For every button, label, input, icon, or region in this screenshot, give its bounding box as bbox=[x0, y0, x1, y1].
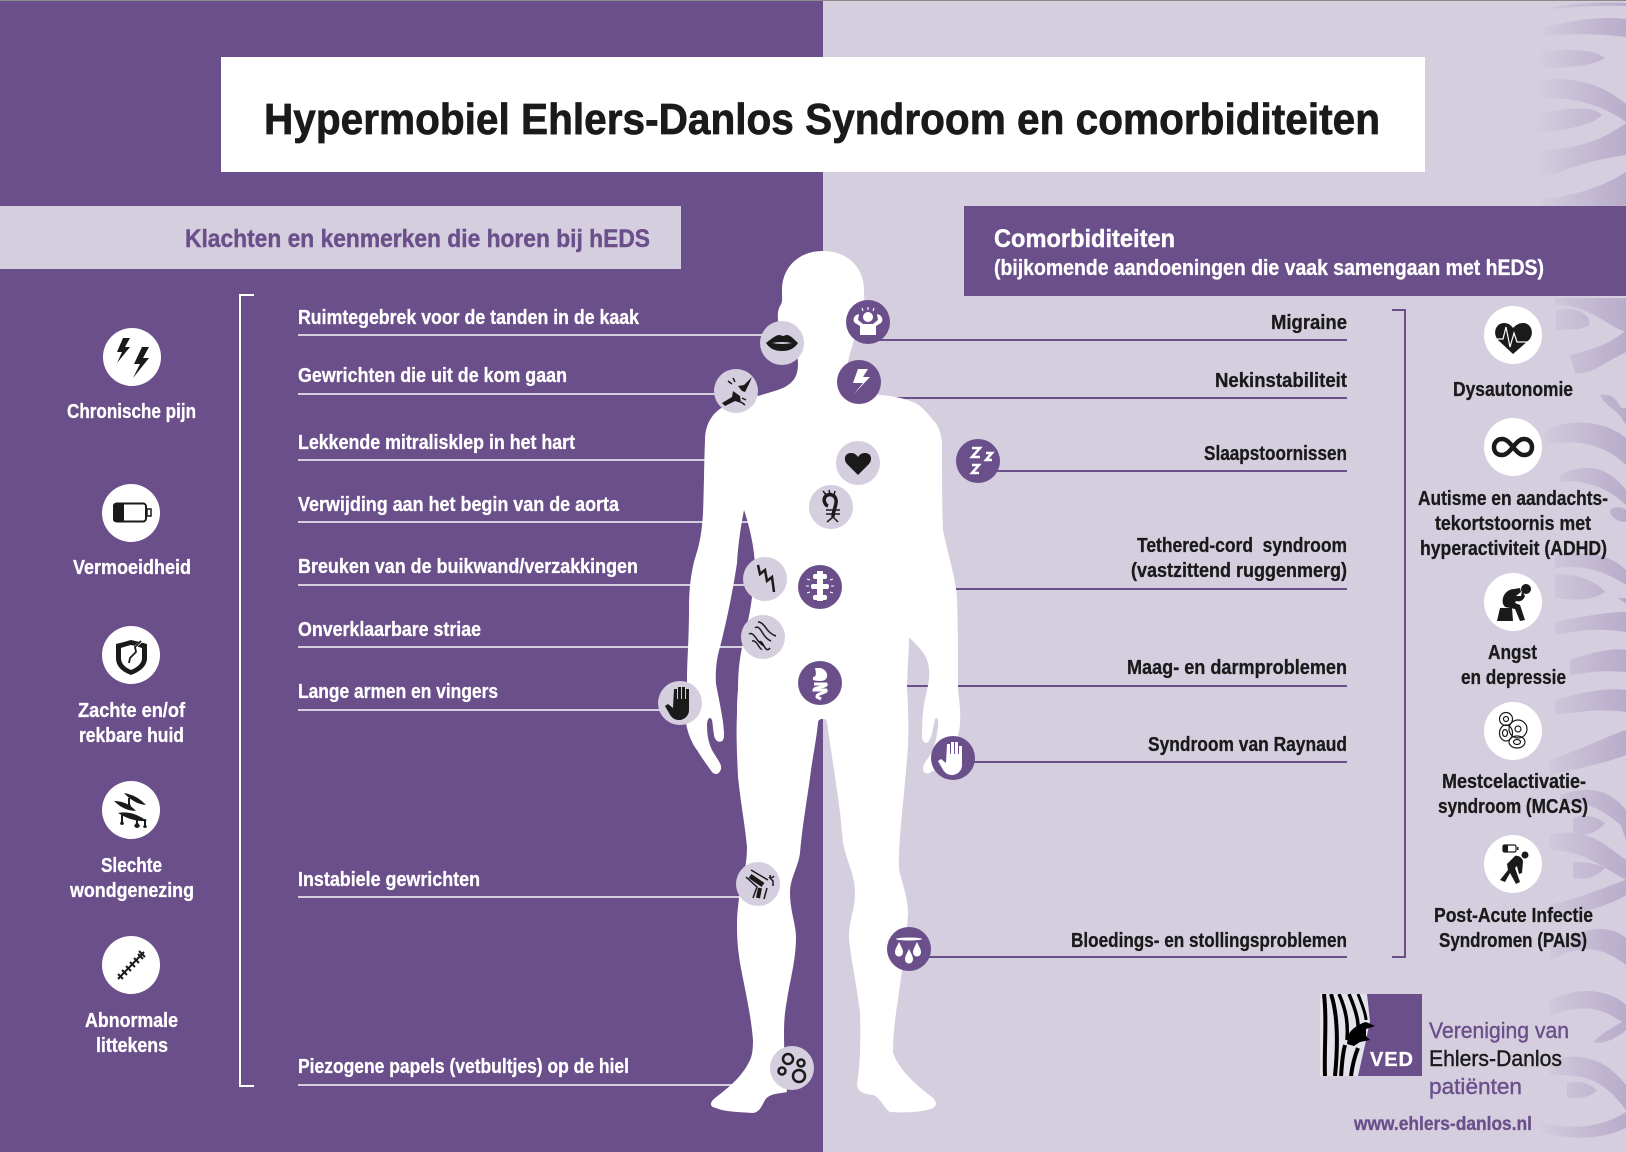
comorbiditeit: post-acute infectie syndromen: Post-Acute Infectie bbox=[1434, 905, 1593, 927]
leader lines right bbox=[859, 340, 1347, 957]
marker: hand rechts bbox=[931, 736, 975, 780]
kenmerk: zachte huid: rekbare huid bbox=[79, 725, 184, 747]
labels left of body: Instabiele gewrichten bbox=[298, 869, 480, 891]
kenmerk: chronische pijn bbox=[67, 328, 196, 423]
left bracket bbox=[240, 295, 254, 1086]
marker: mond bbox=[760, 321, 804, 365]
labels left of body: Ruimtegebrek voor de tanden in de kaak bbox=[298, 307, 640, 329]
comorbiditeit: mestcelactivatie: syndroom (MCAS) bbox=[1438, 796, 1588, 818]
labels right of body: Slaapstoornissen bbox=[1204, 443, 1347, 465]
marker: papels bbox=[770, 1046, 814, 1090]
labels right of body: Tethered-cord syndroom bbox=[1137, 535, 1347, 557]
kenmerk: slechte wondgenezing bbox=[69, 781, 194, 902]
kenmerk: slechte wondgenezing: Slechte bbox=[101, 855, 162, 877]
comorbiditeit: dysautonomie: Dysautonomie bbox=[1453, 379, 1573, 401]
heading: comorbiditeiten: (bijkomende aandoeningen die vaak samengaan met hEDS) bbox=[994, 255, 1544, 280]
labels left of body: Gewrichten die uit de kom gaan bbox=[298, 365, 567, 387]
logo text: Vereniging van bbox=[1429, 1018, 1569, 1043]
comorbiditeit: autisme en adhd: tekortstoornis met bbox=[1435, 513, 1591, 535]
logo: VED bbox=[1320, 994, 1422, 1076]
labels left of body bbox=[298, 307, 640, 1078]
labels right of body: Syndroom van Raynaud bbox=[1148, 734, 1347, 756]
marker: nekinstabiliteit bbox=[837, 360, 881, 404]
comorbiditeit: mestcelactivatie: Mestcelactivatie- bbox=[1442, 771, 1586, 793]
comorbiditeit: autisme en adhd: hyperactiviteit (ADHD) bbox=[1420, 538, 1607, 560]
labels left of body: Onverklaarbare striae bbox=[298, 619, 481, 641]
heading: comorbiditeiten bbox=[964, 206, 1626, 296]
marker: slaap bbox=[956, 439, 1000, 483]
comorbiditeit: angst en depressie: en depressie bbox=[1461, 667, 1566, 689]
right bracket bbox=[1392, 310, 1405, 957]
heading: comorbiditeiten: Comorbiditeiten bbox=[994, 225, 1175, 253]
comorbiditeit: angst en depressie: Angst bbox=[1488, 642, 1537, 664]
marker: wervelkolom bbox=[798, 565, 842, 609]
comorbiditeit: autisme en adhd bbox=[1418, 418, 1608, 560]
comorbiditeit: post-acute infectie syndromen: Syndromen (PAIS) bbox=[1439, 930, 1587, 952]
marker: breuken bbox=[743, 557, 787, 601]
labels right of body: Migraine bbox=[1271, 312, 1347, 334]
heading: klachten en kenmerken bbox=[0, 206, 681, 269]
body silhouette bbox=[686, 251, 960, 1113]
kenmerk: vermoeidheid bbox=[73, 484, 191, 579]
marker: gewricht bbox=[714, 369, 758, 413]
labels right of body: Bloedings- en stollingsproblemen bbox=[1071, 930, 1347, 952]
labels left of body: Lange armen en vingers bbox=[298, 681, 498, 703]
leader lines left bbox=[298, 335, 792, 1085]
marker: bloedingen bbox=[887, 927, 931, 971]
website: www.ehlers-danlos.nl bbox=[1353, 1114, 1532, 1135]
labels right of body: (vastzittend ruggenmerg) bbox=[1131, 560, 1347, 582]
marker: striae bbox=[741, 615, 785, 659]
labels right of body bbox=[1071, 312, 1347, 952]
comorbiditeit: angst en depressie bbox=[1461, 573, 1566, 689]
logo text bbox=[1429, 1018, 1569, 1099]
labels right of body: Maag- en darmproblemen bbox=[1127, 657, 1347, 679]
marker: hand links bbox=[658, 681, 702, 725]
title banner: Hypermobiel Ehlers-Danlos Syndroom en comorbiditeiten bbox=[264, 95, 1380, 144]
labels left of body: Verwijding aan het begin van de aorta bbox=[298, 494, 620, 516]
logo: VED: VED bbox=[1370, 1049, 1413, 1071]
kenmerk: abnormale littekens: Abnormale bbox=[85, 1010, 178, 1032]
marker: hart bbox=[836, 441, 880, 485]
labels left of body: Breuken van de buikwand/verzakkingen bbox=[298, 556, 638, 578]
kenmerk: chronische pijn: Chronische pijn bbox=[67, 401, 196, 423]
kenmerk: abnormale littekens bbox=[85, 936, 178, 1057]
logo text: patiënten bbox=[1429, 1074, 1522, 1099]
kenmerk: zachte huid: Zachte en/of bbox=[78, 700, 185, 722]
labels left of body: Lekkende mitralisklep in het hart bbox=[298, 432, 575, 454]
kenmerk: vermoeidheid: Vermoeidheid bbox=[73, 557, 191, 579]
labels left of body: Piezogene papels (vetbultjes) op de hiel bbox=[298, 1056, 629, 1078]
labels right of body: Nekinstabiliteit bbox=[1215, 370, 1347, 392]
comorbiditeit: mestcelactivatie bbox=[1438, 702, 1588, 818]
comorbiditeit: dysautonomie bbox=[1453, 306, 1573, 401]
heading: klachten en kenmerken: Klachten en kenmerken die horen bij hEDS bbox=[185, 225, 650, 253]
marker: migraine bbox=[846, 300, 890, 344]
marker: knie bbox=[736, 862, 780, 906]
marker: maag en darmen bbox=[798, 661, 842, 705]
kenmerk: slechte wondgenezing: wondgenezing bbox=[69, 880, 194, 902]
logo text: Ehlers-Danlos bbox=[1429, 1046, 1562, 1071]
comorbiditeit: post-acute infectie syndromen bbox=[1434, 835, 1593, 952]
kenmerk: abnormale littekens: littekens bbox=[96, 1035, 168, 1057]
kenmerk: zachte huid bbox=[78, 626, 185, 747]
marker: aorta bbox=[809, 485, 853, 529]
title banner bbox=[221, 57, 1425, 172]
